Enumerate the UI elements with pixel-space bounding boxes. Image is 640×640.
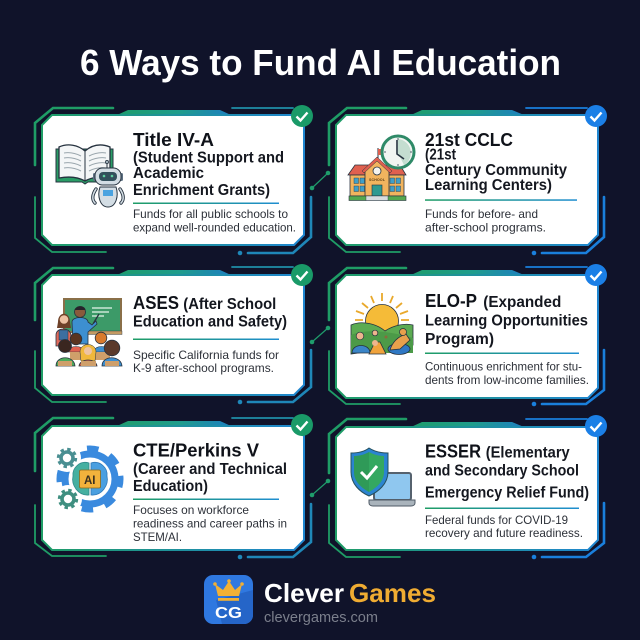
badge: green check: [291, 414, 313, 436]
description: CTE/Perkins V: [133, 503, 287, 544]
heading: 21st CCLC: (21st: [425, 146, 457, 164]
description: CTE/Perkins V: Focuses on workforce: [133, 503, 249, 517]
heading: CTE/Perkins V: CTE/Perkins V: [133, 441, 259, 461]
icon: AI brain in gear: [53, 444, 124, 513]
icon: AI brain in gear: AI: [84, 475, 96, 487]
heading: ASES: [133, 293, 287, 331]
heading: 21st CCLC: 21st CCLC: [425, 130, 513, 150]
heading: CTE/Perkins V: [133, 441, 287, 495]
badge: green check: [291, 264, 313, 286]
heading: ESSER: Emergency Relief Fund): [425, 485, 589, 502]
icon: CG crown tile: [204, 575, 253, 624]
badge: green check: [291, 105, 313, 127]
badge: blue check: [585, 264, 607, 286]
connector: row 3: [310, 479, 330, 497]
description: ASES: [133, 348, 279, 375]
title: 6 Ways to Fund AI Education: [80, 42, 561, 83]
description: ESSER: recovery and future readiness.: [425, 526, 583, 540]
description: Title IV-A: Funds for all public schools to: [133, 207, 288, 221]
description: CTE/Perkins V: readiness and career paths in: [133, 516, 287, 530]
icon: classroom: [56, 299, 122, 366]
panel: CTE/Perkins V: [35, 414, 313, 559]
wordmark: Games: [349, 578, 436, 608]
heading: ESSER: ESSER: [425, 441, 481, 461]
description: ASES: K-9 after-school programs.: [133, 361, 274, 375]
description: 21st CCLC: after-school programs.: [425, 221, 546, 235]
connector: row 2: [310, 326, 330, 344]
description: ELO-P: dents from low-income families.: [425, 373, 589, 387]
icon: school and clock: SCHOOL: [369, 178, 386, 182]
heading: ASES: (After School: [183, 296, 276, 313]
heading: CTE/Perkins V: (Career and Technical: [133, 461, 287, 478]
icon: shield and laptop: [351, 448, 415, 506]
heading: Title IV-A: Title IV-A: [133, 130, 214, 150]
icon: school and clock: [348, 136, 414, 200]
panel: Title IV-A: [35, 105, 313, 255]
icon: CG crown tile: CG: [215, 605, 242, 622]
description: Title IV-A: expand well-rounded education.: [133, 221, 296, 235]
description: 21st CCLC: [425, 207, 546, 235]
heading: 21st CCLC: Century Community: [425, 162, 567, 179]
description: 21st CCLC: Funds for before- and: [425, 207, 538, 221]
website: clevergames.com: [264, 609, 378, 626]
heading: Title IV-A: [133, 130, 284, 199]
heading: ESSER: [425, 441, 589, 502]
badge: blue check: [585, 415, 607, 437]
badge: blue check: [585, 105, 607, 127]
heading: ELO-P: (Expanded: [483, 294, 561, 311]
heading: ELO-P: Learning Opportunities: [425, 313, 588, 330]
heading: ASES: ASES: [133, 293, 179, 313]
description: ASES: Specific California funds for: [133, 348, 279, 362]
heading: ESSER: and Secondary School: [425, 463, 579, 480]
connector: row 1: [310, 171, 330, 190]
logo: Clever Games: [204, 575, 436, 626]
description: ESSER: Federal funds for COVID-19: [425, 513, 568, 527]
heading: CTE/Perkins V: Education): [133, 478, 208, 495]
description: ESSER: [425, 513, 583, 540]
icon: sun over hills with families: [351, 293, 413, 354]
description: ELO-P: [425, 360, 589, 387]
heading: Title IV-A: (Student Support and: [133, 150, 284, 167]
description: CTE/Perkins V: STEM/AI.: [133, 530, 182, 544]
wordmark: Clever: [264, 578, 344, 608]
heading: ASES: Education and Safety): [133, 314, 287, 331]
heading: Title IV-A: Enrichment Grants): [133, 182, 270, 199]
panel: ASES: [35, 264, 313, 404]
heading: ELO-P: ELO-P: [425, 291, 477, 311]
description: ELO-P: Continuous enrichment for stu-: [425, 360, 582, 374]
panel: ESSER: [329, 415, 607, 559]
heading: ELO-P: Program): [425, 331, 494, 348]
heading: ESSER: (Elementary: [486, 444, 570, 461]
description: Title IV-A: [133, 207, 296, 235]
panel: ELO-P: [329, 264, 607, 406]
heading: 21st CCLC: Learning Centers): [425, 177, 552, 194]
panel: 21st CCLC: [329, 105, 607, 255]
heading: Title IV-A: Academic: [133, 165, 204, 182]
heading: 21st CCLC: [425, 130, 567, 194]
wordmark: [264, 578, 436, 608]
icon: open book and robot: [56, 145, 123, 207]
heading: ELO-P: [425, 291, 588, 348]
